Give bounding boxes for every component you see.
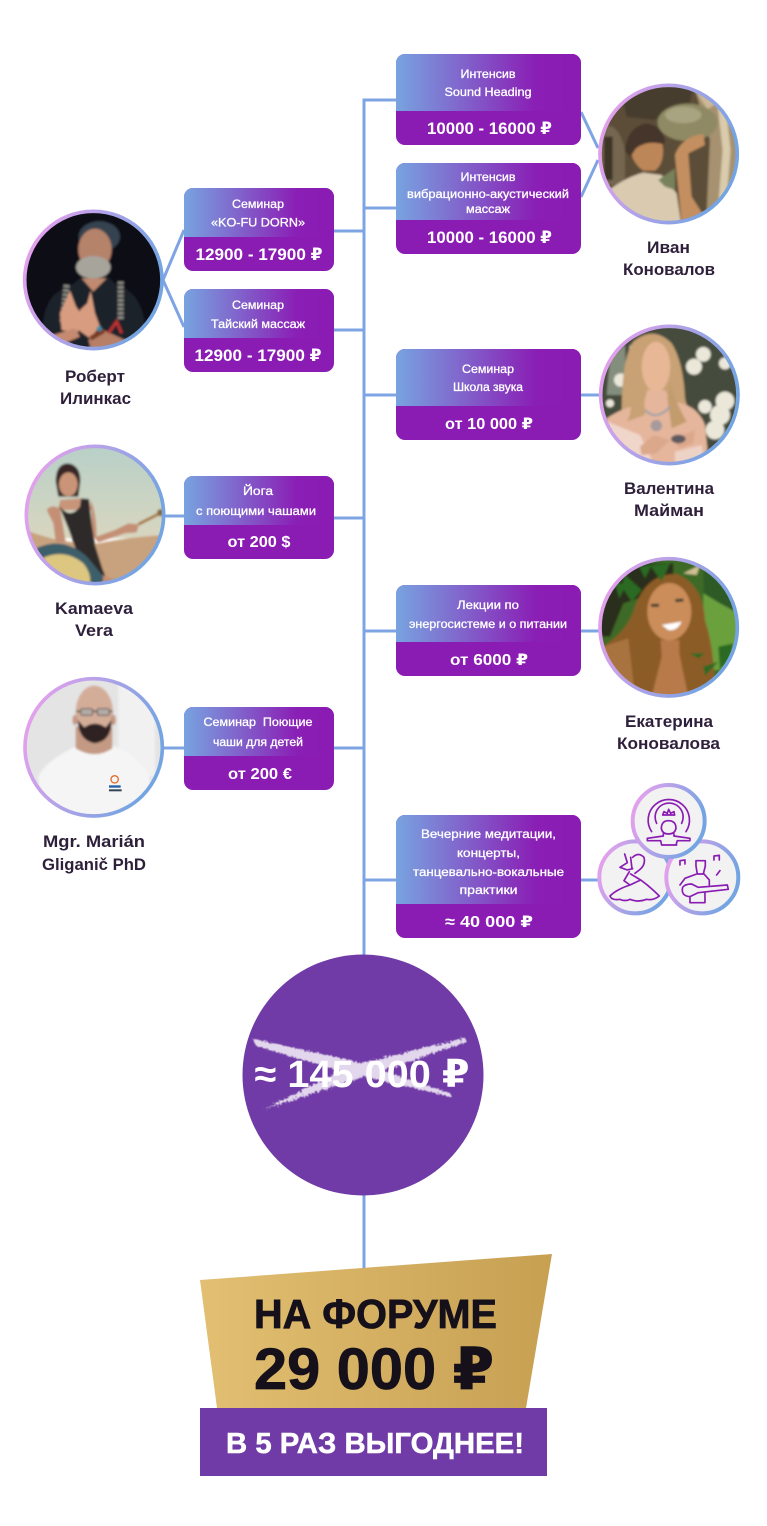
card: Лекции: Лекции по xyxy=(457,598,519,612)
card: Sound Heading xyxy=(396,54,581,145)
card: KO-FU DORN xyxy=(184,188,334,271)
banner: цена на форуме xyxy=(200,1254,552,1408)
card: Тайский массаж: 12900 - 17900 ₽ xyxy=(194,346,322,365)
card: Тайский массаж xyxy=(184,289,334,372)
names xyxy=(42,239,721,874)
names: Kamaeva xyxy=(55,600,134,618)
card: Лекции: энергосистеме и о питании xyxy=(409,617,567,631)
icon: guitarist xyxy=(666,841,738,913)
card: Поющие чаши для детей: от 200 € xyxy=(228,766,292,783)
card: Поющие чаши для детей: чаши для детей xyxy=(213,735,303,749)
names: Илинкас xyxy=(60,390,131,408)
card: KO-FU DORN: «KO-FU DORN» xyxy=(211,216,305,230)
chalk cross xyxy=(253,1038,467,1110)
banner: цена на форуме: 29 000 ₽ xyxy=(254,1337,494,1402)
names: Коновалова xyxy=(617,735,721,753)
card: Вечерние медитации: танцевально-вокальные xyxy=(413,865,564,879)
card: Лекции: от 6000 ₽ xyxy=(450,652,528,669)
card: вибрационно-акустический массаж: массаж xyxy=(466,202,510,216)
card: Вечерние медитации: концерты, xyxy=(457,846,520,860)
banner: цена на форуме: НА ФОРУМЕ xyxy=(254,1291,497,1337)
names: Роберт xyxy=(65,368,125,386)
card: Школа звука xyxy=(396,349,581,440)
card: вибрационно-акустический массаж: 10000 - 16000 ₽ xyxy=(427,228,552,247)
card: Тайский массаж: Семинар xyxy=(232,298,284,312)
card: Школа звука: Семинар xyxy=(462,362,514,376)
card: вибрационно-акустический массаж xyxy=(396,163,581,254)
icon: dancer xyxy=(599,841,671,913)
names: Коновалов xyxy=(623,261,715,279)
card: вибрационно-акустический массаж: вибрационно-акустический xyxy=(407,187,569,201)
portrait: Екатерина Коновалова xyxy=(598,557,740,700)
names: Vera xyxy=(75,622,114,640)
card: Sound Heading: Sound Heading xyxy=(444,85,532,99)
names: Gliganič PhD xyxy=(42,856,146,874)
card: Школа звука: Школа звука xyxy=(453,380,523,394)
card: Вечерние медитации: практики xyxy=(460,883,518,897)
connector lines xyxy=(163,99,600,1270)
card: Лекции xyxy=(396,585,581,676)
card: Sound Heading: Интенсив xyxy=(460,67,516,81)
card: Йога xyxy=(184,476,334,559)
portrait: Иван Коновалов xyxy=(597,83,743,227)
portrait: Роберт Илинкас xyxy=(20,207,167,357)
card: KO-FU DORN: Семинар xyxy=(232,197,284,211)
names: Екатерина xyxy=(625,713,714,731)
card: Вечерние медитации xyxy=(396,815,581,938)
card: Поющие чаши для детей xyxy=(184,707,334,790)
card: Тайский массаж: Тайский массаж xyxy=(211,317,305,331)
card: Вечерние медитации: Вечерние медитации, xyxy=(421,827,556,841)
banner: в 5 раз выгоднее: В 5 РАЗ ВЫГОДНЕЕ! xyxy=(226,1428,524,1460)
card: Поющие чаши для детей: Семинар Поющие xyxy=(204,715,313,729)
icons: три практики xyxy=(599,785,738,913)
card: Йога: Йога xyxy=(243,483,273,498)
icon: meditation xyxy=(633,785,705,857)
circle: общая цена: ≈ 145 000 ₽ xyxy=(254,1054,470,1096)
banner: в 5 раз выгоднее xyxy=(200,1408,547,1476)
names: Валентина xyxy=(624,480,715,498)
card: Йога: с поющими чашами xyxy=(196,504,316,518)
names: Mgr. Marián xyxy=(43,833,145,851)
card: Йога: от 200 $ xyxy=(228,534,291,551)
circle: общая цена xyxy=(242,954,484,1196)
names: Майман xyxy=(634,502,704,520)
card: вибрационно-акустический массаж: Интенсив xyxy=(460,170,516,184)
card: Школа звука: от 10 000 ₽ xyxy=(445,416,533,433)
portrait: Валентина Майман xyxy=(600,325,740,465)
names: Иван xyxy=(647,239,690,257)
card: Sound Heading: 10000 - 16000 ₽ xyxy=(427,119,552,138)
portrait: Mgr. Marián Gliganič PhD xyxy=(23,677,163,820)
card: Вечерние медитации: ≈ 40 000 ₽ xyxy=(445,914,533,931)
portrait: Kamaeva Vera xyxy=(25,445,165,585)
card: KO-FU DORN: 12900 - 17900 ₽ xyxy=(196,245,323,264)
